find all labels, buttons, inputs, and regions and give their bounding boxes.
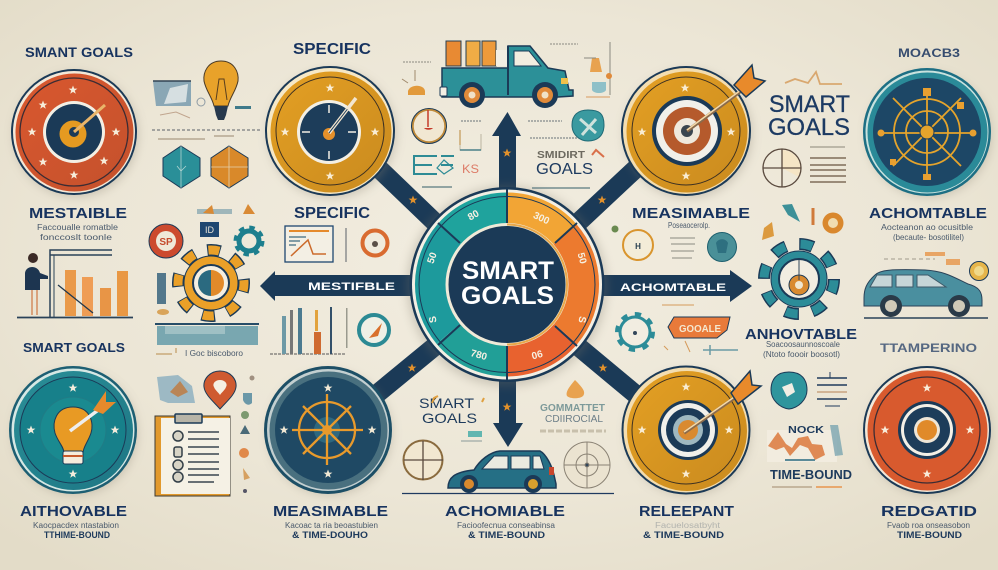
- text: measurable label: [632, 205, 750, 230]
- icon: teal gear: [763, 243, 835, 315]
- arrow: left with label: [260, 271, 415, 301]
- panel: bottom-left labels: [20, 503, 127, 540]
- heading: smart goals right: [768, 91, 850, 141]
- doodle above car: [884, 252, 988, 280]
- icon: SP badge: SP: [159, 237, 173, 248]
- icon: chart doodle: [460, 121, 580, 150]
- icon: big orange gear: [174, 246, 248, 320]
- caption strokes: [158, 136, 234, 139]
- chart: person presenting bars: [17, 250, 133, 318]
- icon: small teal gear lower: [618, 305, 694, 352]
- badge marks: [177, 146, 248, 188]
- panel: band under gear: I Goc biscoboro: [185, 349, 244, 358]
- arrow in target: [687, 88, 745, 131]
- heading: MESTAIBLE: [29, 205, 127, 222]
- heading: SMANT GOALS: [25, 44, 133, 60]
- panel: left stat block: [17, 205, 133, 318]
- text: commitment faded: CDIIROCIAL: [545, 414, 603, 425]
- icon: map pin: [204, 371, 236, 409]
- icon: orange ribbon: [668, 317, 730, 338]
- segment labels: 80: [466, 208, 482, 223]
- icon: car bottom: [402, 451, 614, 494]
- icon: slide chart: [285, 226, 333, 262]
- dial face: [297, 100, 361, 164]
- icon: teal shield: [572, 110, 604, 141]
- heading: MEASIMABLE: [273, 503, 388, 520]
- segment labels: 50: [426, 251, 440, 265]
- central wheel: SMART GOALS: [407, 186, 607, 386]
- panel: top-left red dial: [11, 44, 138, 197]
- text: commitment faded: GOMMATTET: [540, 403, 605, 414]
- description: Kaocpacdex ntastabion: [33, 521, 119, 530]
- text: achievable middle right: ANHOVTABLE: [745, 326, 857, 343]
- arrow: right with label: ACHOMTABLE: [620, 282, 726, 294]
- target rings: [658, 400, 718, 460]
- wheel dividers: [438, 188, 577, 380]
- segment labels: 06: [531, 349, 545, 362]
- panel: bottom-center labels: & TIME-BOUND: [468, 530, 546, 540]
- description: Faccoualle romatble: [37, 223, 119, 232]
- heading: MOACB3: [898, 46, 960, 60]
- text: measurable label: Poseaocerolp.: [668, 221, 710, 230]
- panel: band under gear: [155, 323, 259, 358]
- panel: measurable gold target: [621, 65, 765, 198]
- heading: smart goals right: SMART: [769, 91, 850, 118]
- caption accent: [816, 486, 842, 488]
- text: achievable right: (becaute- bosotilitel): [893, 233, 964, 242]
- lines list: [670, 238, 695, 258]
- icon: teal shield lower: [771, 372, 807, 409]
- icon: wheel doodle: [763, 149, 801, 187]
- segment: teal bottom: [436, 284, 507, 377]
- segment: teal top: [438, 192, 507, 284]
- arrow: down: [493, 380, 523, 447]
- panel: bottom-left teal bulb: [9, 340, 137, 495]
- text: achievable middle right: Soacoosaunnoscoale: [766, 340, 841, 349]
- panel: bottom-right red target: [863, 341, 991, 495]
- panel: specific gold dial: [265, 41, 396, 198]
- icon: bowl doodle: [402, 44, 578, 95]
- icon: small gold ring: [612, 226, 653, 260]
- heading: second specific: SPECIFIC: [294, 205, 370, 222]
- decorative doodle above heading: [785, 72, 842, 84]
- text: smart goals bottom center: GOALS: [422, 410, 477, 426]
- panel: bottom-right labels: TIME-BOUND: [897, 530, 963, 540]
- icon: small gold ring: H: [635, 242, 641, 251]
- red KS mark: KS: [462, 162, 479, 176]
- panel: left stat block: fonccoslt toonle: [40, 233, 113, 242]
- text: smart goals center top: GOALS: [536, 161, 593, 178]
- caption strokes: [772, 486, 812, 488]
- target rings: [652, 96, 722, 166]
- heading: SMART GOALS: [23, 340, 125, 355]
- line doodle: [703, 345, 738, 355]
- decorative tick: [345, 228, 347, 262]
- wheel icon: [880, 92, 974, 176]
- arrow icon: [70, 405, 105, 431]
- divider: dots: [152, 129, 262, 131]
- segment: orange bottom: [507, 284, 578, 377]
- icon: blue car right: [864, 270, 988, 318]
- icon: SP badge: [149, 224, 183, 258]
- text: smart goals bottom center: SMART: [419, 395, 475, 411]
- wheel icon: [314, 417, 340, 443]
- icon: clipboard: [155, 414, 230, 496]
- text: time-bound: TIME-BOUND: [770, 467, 852, 482]
- icon: E mark: [414, 156, 454, 174]
- text: smart goals bottom center: [419, 395, 477, 426]
- icon: compass left: [404, 440, 443, 480]
- segment: orange right: [507, 224, 599, 344]
- text: achievable middle right: (Ntoto foooir boosotl): [763, 350, 840, 359]
- strokes row above gear: [197, 204, 255, 214]
- bulb icon: [54, 407, 92, 453]
- description: Kacoac ta ria beoastubien: [285, 521, 378, 530]
- line with ticks: [422, 187, 590, 188]
- center title: GOALS: [461, 282, 554, 310]
- icon: tube doodle: [584, 42, 612, 97]
- illustration: mountains with NOCK label: [767, 425, 843, 462]
- heading: ACHOMIABLE: [445, 503, 565, 520]
- icon: teal badge: [163, 146, 200, 188]
- panel: bottom-left labels: TTHIME-BOUND: [44, 530, 110, 540]
- description: Facioofecnua conseabinsa: [457, 521, 556, 530]
- segment: gold top: [507, 192, 576, 284]
- panel: bottom-second labels: & TIME-DOUHO: [292, 530, 368, 540]
- small icons column: [239, 376, 254, 493]
- text: smart goals center top: SMIDIRT: [537, 150, 585, 161]
- icon: bar strip chart: [270, 307, 348, 354]
- arrow: left with label: MESTIFBLE: [308, 281, 395, 293]
- segment labels: S: [427, 315, 440, 324]
- panel: bottom-center labels: [445, 503, 565, 540]
- text: measurable label: MEASIMABLE: [632, 205, 750, 222]
- description: Fvaob roa onseasobon: [887, 521, 970, 530]
- arrow in target: [684, 394, 740, 433]
- panel: bottom-fourth labels: & TIME-BOUND: [643, 530, 725, 540]
- icon: ID box: [200, 222, 219, 237]
- dial face: [43, 101, 105, 163]
- heading: TTAMPERINO: [880, 341, 977, 355]
- panel: bottom-second labels: [273, 503, 388, 540]
- truck body: [442, 46, 573, 97]
- text: achievable right: ACHOMTABLE: [869, 205, 987, 222]
- icon: teal gauge: [359, 315, 389, 345]
- wheels: [459, 82, 485, 108]
- icon: truck: [440, 41, 573, 108]
- segment labels: S: [575, 315, 587, 324]
- icon: gauge: [412, 108, 446, 144]
- icon: compass right: [564, 442, 610, 488]
- center title: [461, 257, 554, 310]
- heading: AITHOVABLE: [20, 503, 127, 520]
- heading: smart goals right: GOALS: [768, 114, 850, 141]
- target rings: [898, 401, 956, 459]
- connector ornaments: [408, 148, 607, 411]
- icon: orange badge: [211, 146, 248, 188]
- panel: bottom-fourth labels: [639, 503, 734, 540]
- segment labels: 780: [469, 348, 489, 363]
- heading: RELEEPANT: [639, 503, 734, 520]
- panel: bottom-right labels: [881, 503, 977, 540]
- icon: map blob: [157, 375, 195, 403]
- checklist: [173, 431, 183, 482]
- arrow: up: [492, 112, 521, 190]
- text: achievable right: Aocteanon ao ocusitble: [881, 223, 974, 232]
- panel: bottom navy wheel: [264, 366, 392, 495]
- arrow: right with label: [600, 270, 752, 302]
- doodle: teal tag: [432, 396, 484, 441]
- segment labels: 300: [531, 210, 551, 227]
- panel: top-right teal wheel: [863, 46, 991, 197]
- lines list: [817, 372, 847, 406]
- icon: orange ribbon: GOOALE: [679, 324, 721, 335]
- illustration: mountains with NOCK label: NOCK: [788, 425, 825, 436]
- cargo crates: [446, 41, 496, 66]
- connector: diagonal bars: [370, 160, 645, 398]
- panel: relevant gold target: [622, 366, 761, 495]
- text: smart goals center top: [536, 150, 604, 178]
- text: commitment faded: [540, 403, 606, 431]
- icon: light bulb: [204, 61, 238, 120]
- figure: presenter: [25, 253, 48, 315]
- segment labels: [426, 208, 588, 363]
- segment: teal left: [415, 224, 507, 344]
- heading: SPECIFIC: [293, 41, 371, 58]
- text: achievable middle right: [745, 326, 857, 359]
- icon: teal ball: [708, 232, 736, 262]
- icon: small tool: [157, 273, 169, 315]
- lines list: [810, 147, 846, 182]
- text: achievable right: [869, 205, 987, 242]
- heading: REDGATID: [881, 503, 977, 520]
- icon: orange drop: [567, 380, 584, 398]
- icon: ID box: ID: [205, 225, 215, 235]
- icon: small teal gear: [236, 228, 262, 254]
- wheel ring: [447, 224, 567, 344]
- doodles above gear: [762, 204, 844, 240]
- center title: SMART: [462, 257, 554, 285]
- icon: map note: [153, 81, 251, 118]
- segment labels: 50: [575, 252, 588, 266]
- description: Facuelosatbyht: [655, 521, 721, 530]
- icon: orange ring: [362, 230, 388, 256]
